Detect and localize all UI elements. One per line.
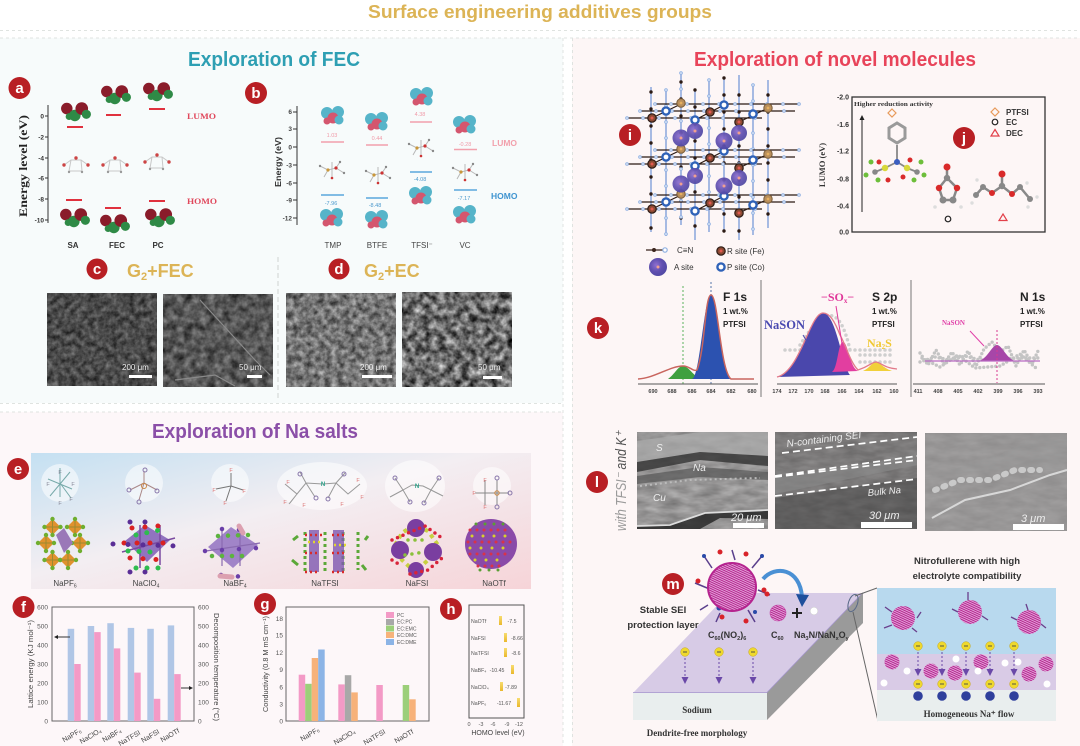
crystal labels: NaClO xyxy=(133,579,157,588)
chart f: lattice energy and decomposition temperature: Decomposition temperature (°C) xyxy=(212,613,220,721)
chart b: energy levels of TMP, BTFE, TFSI, VC: 0 xyxy=(288,144,292,152)
chart h: HOMO levels: -7.89 xyxy=(505,685,517,691)
diagram m: magnified interface: electrolyte compatibility xyxy=(913,571,1022,582)
chart f: lattice energy and decomposition temperature: 300 xyxy=(37,662,48,668)
chart b: energy levels of TMP, BTFE, TFSI, VC: 1.03 xyxy=(327,133,337,139)
spectrum: F 1s: 688 xyxy=(667,389,677,395)
badge l: l xyxy=(595,474,599,491)
chart f: lattice energy and decomposition temperature: 300 xyxy=(198,662,209,668)
badge j: j xyxy=(961,130,966,147)
label: stable SEI protection layer xyxy=(627,605,699,631)
anion: OTf: F xyxy=(483,478,487,484)
compound labels xyxy=(708,630,850,642)
crystal labels: 6 xyxy=(74,584,77,590)
chart g: conductivity: 6 xyxy=(279,684,283,692)
diagram m: magnified interface: Nitrofullerene with high xyxy=(914,556,1020,567)
heading: Exploration of novel molecules: Exploration of novel molecules xyxy=(694,49,976,71)
chart b: energy levels of TMP, BTFE, TFSI, VC: VC xyxy=(459,241,471,250)
SEM image: S, Na, Cu layers: Cu xyxy=(653,493,666,504)
chart f: lattice energy and decomposition temperature: 600 xyxy=(198,604,209,612)
badge m xyxy=(662,573,684,595)
spectrum: S 2p: −SO xyxy=(821,290,844,304)
diagram m: magnified interface: Homogeneous Na⁺ flow xyxy=(924,709,1015,719)
anion: OTf xyxy=(472,476,512,511)
badge c: c xyxy=(93,261,101,278)
SEM image: S, Na, Cu layers: Na xyxy=(693,463,706,474)
spectrum: F 1s: 1 wt.% xyxy=(723,307,748,316)
chart k: XPS spectra xyxy=(638,280,1046,397)
chart j: LUMO levels: LUMO (eV) xyxy=(817,143,827,187)
anion: PF6: F xyxy=(46,482,50,488)
nitrofullerene molecule xyxy=(695,550,770,624)
spectrum: S 2p: 164 xyxy=(854,389,865,395)
badge c xyxy=(86,258,108,280)
chart b: energy levels of TMP, BTFE, TFSI, VC: -8.48 xyxy=(369,203,381,209)
anion: TFSI: N xyxy=(321,482,325,488)
anion: TFSI: F xyxy=(360,495,364,501)
chart j: LUMO levels: -0.8 xyxy=(837,176,849,184)
legend g: EC:PC xyxy=(397,620,413,626)
spectrum: F 1s xyxy=(638,282,758,395)
chart h: HOMO levels: 0 xyxy=(467,722,471,728)
spectrum: F 1s: 682 xyxy=(726,389,736,395)
compound labels: O xyxy=(839,630,846,640)
chart f: lattice energy and decomposition temperature: NaOTf xyxy=(160,728,181,744)
spectrum: S 2p: 166 xyxy=(837,389,847,395)
chart f: lattice energy and decomposition temperature xyxy=(28,604,220,746)
spectrum: N 1s: PTFSI xyxy=(1020,320,1043,329)
compound labels: 2 xyxy=(737,636,740,642)
badge e: e xyxy=(14,461,22,478)
chart b: energy levels of TMP, BTFE, TFSI, VC: -4.08 xyxy=(414,177,426,183)
chart f: lattice energy and decomposition temperature: NaFSI xyxy=(140,729,161,745)
chart f: lattice energy and decomposition temperature: 500 xyxy=(198,624,209,630)
spectrum: N 1s: 411 xyxy=(914,389,922,395)
badge e xyxy=(7,458,29,480)
chart h: HOMO levels: NaBF₄ xyxy=(471,668,486,674)
chart h: HOMO levels: NaFSI xyxy=(471,636,486,642)
compound labels: x xyxy=(836,636,840,642)
spectrum: S 2p: 162 xyxy=(872,389,882,395)
badge g: g xyxy=(260,596,270,613)
compound labels: 6 xyxy=(743,636,746,642)
SEM image: 3 µm surface: 3 μm xyxy=(1021,513,1045,525)
chart b: energy levels of TMP, BTFE, TFSI, VC: TFSI⁻ xyxy=(411,241,433,250)
chart a: energy levels of SA, FEC, PC: -4 xyxy=(38,156,44,162)
anion: TFSI: F xyxy=(286,480,290,486)
chart f: lattice energy and decomposition temperature: 400 xyxy=(37,642,48,650)
chart a: energy levels of SA, FEC, PC: -8 xyxy=(38,196,44,204)
chart b: energy levels of TMP, BTFE, TFSI, VC: -6 xyxy=(286,180,292,188)
spectrum: S 2p: S xyxy=(885,336,892,350)
spectrum: N 1s xyxy=(913,290,1046,395)
badge k xyxy=(587,317,609,339)
badge i: i xyxy=(628,127,632,144)
molecule: EC xyxy=(933,164,963,209)
SEM image: S, Na, Cu layers: S xyxy=(656,443,663,454)
rotated label: with TFSI and K: with TFSI⁻ and K⁺ xyxy=(613,430,630,531)
crystal: NaFSI xyxy=(391,519,442,578)
badge l xyxy=(586,471,608,493)
anion: BF4: F xyxy=(229,468,233,474)
compound labels: 60 xyxy=(778,636,784,642)
anion: TFSI: F xyxy=(302,503,306,509)
blue curved arrow xyxy=(763,571,809,607)
chart j: LUMO levels: -2.0 xyxy=(837,94,849,102)
chart j: LUMO levels: -0.4 xyxy=(837,204,849,210)
chart g: conductivity: 18 xyxy=(276,616,283,623)
chart b: energy levels of TMP, BTFE, TFSI, VC: -7.17 xyxy=(458,196,470,202)
molecule: PTFSI xyxy=(864,123,926,182)
chart b: energy levels of TMP, BTFE, TFSI, VC: Energy (eV) xyxy=(274,137,283,187)
crystal labels: 4 xyxy=(157,584,160,590)
nitrofullerenes xyxy=(884,592,1046,634)
diagram m: sodium slab: Dendrite-free morphology xyxy=(647,728,748,738)
spectrum: N 1s: 405 xyxy=(953,389,963,395)
anion: TFSI: F xyxy=(283,500,287,506)
badge b: b xyxy=(251,85,261,102)
anion: BF4 xyxy=(212,468,246,507)
badge a xyxy=(8,77,30,99)
panel i: Prussian-blue lattice xyxy=(627,73,800,276)
spectrum: S 2p: − xyxy=(847,290,854,304)
spectrum: S 2p: NaSON xyxy=(764,318,805,332)
spectrum: N 1s: 1 wt.% xyxy=(1020,307,1045,316)
legend g: PC xyxy=(397,613,404,619)
heading: Exploration of FEC: Exploration of FEC xyxy=(188,49,360,71)
chart b: energy levels of TMP, BTFE, TFSI, VC: -9 xyxy=(286,198,292,204)
anion: PF6: F xyxy=(69,497,73,503)
chart f: lattice energy and decomposition temperature: 200 xyxy=(198,680,209,688)
background panel: FEC xyxy=(0,38,563,403)
SEM image: N-containing SEI and bulk Na: Bulk Na xyxy=(867,485,901,499)
chart a: energy levels of SA, FEC, PC: HOMO xyxy=(187,197,217,206)
spectrum: N 1s: 402 xyxy=(973,389,983,395)
spectrum: S 2p: 170 xyxy=(804,389,814,395)
badge f xyxy=(12,596,34,618)
chart h: HOMO levels: NaTFSI xyxy=(471,651,489,657)
chart h: HOMO levels: NaOTf xyxy=(471,619,487,625)
legend i: R site (Fe) xyxy=(727,247,765,256)
legend i: A site xyxy=(674,263,694,272)
SEM image: N-containing SEI and bulk Na xyxy=(775,430,917,529)
chart h: HOMO levels: HOMO level (eV) xyxy=(471,730,525,737)
spectrum: S 2p: Na xyxy=(867,336,882,350)
badge h xyxy=(440,598,462,620)
chart h: HOMO levels xyxy=(467,605,525,737)
anion: PF6: F xyxy=(71,482,75,488)
spectrum: S 2p: 168 xyxy=(820,389,830,395)
panel e: anion and crystal structures xyxy=(31,453,531,590)
crystal: NaTFSI xyxy=(292,530,368,574)
legend j: DEC xyxy=(1006,129,1023,138)
legend i xyxy=(646,246,765,276)
crystal labels: NaPF xyxy=(53,579,74,588)
chart f: lattice energy and decomposition temperature: NaPF₆ xyxy=(62,728,83,744)
badge b xyxy=(245,82,267,104)
spectrum: S 2p: 1 wt.% xyxy=(872,307,897,316)
anion: TFSI: F xyxy=(356,478,360,484)
chart g: conductivity: 0 xyxy=(279,718,283,726)
chart b: energy levels of TMP, BTFE, TFSI, VC: -0.28 xyxy=(459,142,471,148)
crystal labels: 4 xyxy=(244,584,247,590)
compound labels: (NO xyxy=(721,630,737,640)
crystal: NaClO4 xyxy=(113,522,178,572)
badge d xyxy=(328,258,350,280)
crystal labels: NaBF xyxy=(223,579,244,588)
chart j: LUMO levels: -1.6 xyxy=(837,122,849,129)
chart h: HOMO levels: -11.67 xyxy=(497,701,511,707)
SEM image: G2+EC 200 µm: 200 μm xyxy=(360,363,387,372)
heading: G2+FEC: G xyxy=(127,261,141,281)
SEM image: N-containing SEI and bulk Na: N-containing SEI xyxy=(786,430,862,450)
chart j: LUMO levels: -1.2 xyxy=(837,148,849,156)
SEM image: G2+FEC 50 µm xyxy=(163,294,273,387)
SEM image: G2+FEC 200 µm: 200 μm xyxy=(122,363,149,372)
molecule: DEC xyxy=(970,170,1039,209)
chart b: energy levels of TMP, BTFE, TFSI, VC: TMP xyxy=(325,241,341,250)
spectrum: S 2p: S 2p xyxy=(872,290,897,304)
chart f: lattice energy and decomposition temperature: 100 xyxy=(198,700,209,706)
diagram m: magnified interface xyxy=(877,556,1056,721)
chart a: energy levels of SA, FEC, PC: PC xyxy=(152,241,164,250)
chart g: conductivity: NaOTf xyxy=(394,729,415,745)
chart a: energy levels of SA, FEC, PC: -10 xyxy=(35,218,44,224)
badge k: k xyxy=(594,320,603,337)
heading: G2+EC: G xyxy=(364,261,378,281)
chart g: conductivity: 15 xyxy=(276,632,283,640)
chart j: LUMO levels xyxy=(817,94,1045,236)
chart b: energy levels of TMP, BTFE, TFSI, VC: HOMO xyxy=(491,191,518,201)
badge j xyxy=(953,127,975,149)
legend i: P site (Co) xyxy=(727,263,765,272)
anion: BF4: F xyxy=(223,501,227,507)
diagram m: sodium slab: Sodium xyxy=(682,705,712,715)
spectrum: F 1s: F 1s xyxy=(723,290,747,304)
chart b: energy levels of TMP, BTFE, TFSI, VC: 3 xyxy=(288,126,292,133)
chart h: HOMO levels: -3 xyxy=(479,722,483,728)
spectrum: N 1s: 393 xyxy=(1033,389,1043,395)
legend g: EC:EMC xyxy=(397,626,417,632)
heading: G2+EC: +EC xyxy=(384,261,420,281)
title: Surface engineering additives groups xyxy=(368,2,712,22)
anion: PF6 xyxy=(46,468,75,507)
chart j: LUMO levels: Higher reduction activity xyxy=(854,102,933,108)
anion: FSI: N xyxy=(415,484,419,490)
chart h: HOMO levels: NaClO₄ xyxy=(471,685,489,691)
chart h: HOMO levels: -8.6 xyxy=(512,651,521,657)
badge d: d xyxy=(334,261,344,278)
chart f: lattice energy and decomposition temperature: 100 xyxy=(37,700,48,706)
chart h: HOMO levels: -6 xyxy=(491,722,495,728)
badge i xyxy=(619,124,641,146)
spectrum: N 1s: 396 xyxy=(1013,389,1023,395)
anion: PF6: F xyxy=(58,470,62,476)
spectrum: N 1s: 399 xyxy=(993,389,1003,395)
crystal: NaOTf xyxy=(465,519,517,570)
compound labels: 3 xyxy=(806,636,809,642)
chart h: HOMO levels: -9 xyxy=(505,722,509,728)
legend j xyxy=(991,108,1029,138)
chart a: energy levels of SA, FEC, PC: -2 xyxy=(38,134,44,142)
compound labels: 60 xyxy=(714,636,721,642)
spectrum: S 2p: x xyxy=(844,297,848,305)
crystal labels: NaFSI xyxy=(406,579,428,588)
chart g: conductivity: Conductivity (0.8 M mS cm⁻¹) xyxy=(263,616,270,712)
label: stable SEI protection layer: Stable SEI xyxy=(640,605,686,616)
chart b: energy levels of TMP, BTFE, TFSI, VC: -7.96 xyxy=(325,201,337,207)
chart f: lattice energy and decomposition temperature: NaBF₄ xyxy=(102,728,123,744)
crystal labels xyxy=(53,579,507,590)
SEM image: G2+FEC 200 µm xyxy=(47,293,157,386)
spectrum: F 1s: 684 xyxy=(706,389,717,395)
anion: OTf: F xyxy=(472,491,476,497)
chart h: HOMO levels: -8.66 xyxy=(511,636,523,642)
chart h: HOMO levels: NaPF₆ xyxy=(471,701,486,707)
SEM image: N-containing SEI and bulk Na: 30 μm xyxy=(869,510,899,522)
badge m: m xyxy=(666,576,680,593)
SEM image: 3 µm surface xyxy=(925,433,1067,531)
chart g: conductivity: 9 xyxy=(279,667,283,674)
spectrum: S 2p: 2 xyxy=(882,343,886,351)
chart b: energy levels of TMP, BTFE, TFSI, VC: LUMO xyxy=(492,138,517,148)
chart b: energy levels of TMP, BTFE, TFSI, VC: BTFE xyxy=(367,241,387,250)
compound labels: N/NaN xyxy=(809,630,836,640)
crystal: NaBF4 xyxy=(205,526,260,577)
anion: ClO4 xyxy=(127,468,159,504)
spectrum: S 2p: 160 xyxy=(889,389,899,395)
legend j: PTFSI xyxy=(1006,108,1029,117)
compound labels: C xyxy=(771,630,778,640)
legend i: C≡N xyxy=(677,246,693,255)
SEM image: G2+FEC 50 µm: 50 μm xyxy=(239,363,262,372)
chart g: conductivity: 12 xyxy=(276,650,283,657)
SEM image: S, Na, Cu layers: 20 μm xyxy=(730,512,761,524)
compound labels: ) xyxy=(740,630,743,640)
chart a: energy levels of SA, FEC, PC: 0 xyxy=(40,114,44,120)
chart h: HOMO levels: -12 xyxy=(515,722,523,728)
spectrum: N 1s: NaSON xyxy=(942,319,965,327)
chart a: energy levels of SA, FEC, PC: FEC xyxy=(109,241,125,250)
chart f: lattice energy and decomposition temperature: NaClO₄ xyxy=(79,728,103,746)
spectrum: S 2p: 172 xyxy=(788,389,798,395)
spectrum: F 1s: PTFSI xyxy=(723,320,746,329)
spectrum: N 1s: N 1s xyxy=(1020,290,1046,304)
chart a: energy levels of SA, FEC, PC: SA xyxy=(67,241,79,250)
compound labels: Na xyxy=(794,630,806,640)
chart g: conductivity xyxy=(263,607,429,746)
crystal labels: NaOTf xyxy=(482,579,507,588)
anion: TFSI: F xyxy=(340,502,344,508)
chart a: energy levels of SA, FEC, PC: -6 xyxy=(38,176,44,182)
chart b: energy levels of TMP, BTFE, TFSI, VC xyxy=(274,87,518,250)
chart h: HOMO levels: -10.45 xyxy=(490,668,504,674)
anion: BF4: F xyxy=(212,488,216,494)
chart f: lattice energy and decomposition temperature: Lattice energy (KJ mol⁻¹) xyxy=(28,620,35,708)
badge h: h xyxy=(446,601,456,618)
legend g: EC:DMC xyxy=(397,633,417,639)
chart f: lattice energy and decomposition temperature: 500 xyxy=(37,624,48,630)
heading: G2+EC: 2 xyxy=(378,271,384,283)
C60 and salt particles xyxy=(880,654,1054,688)
legend j: EC xyxy=(1006,118,1017,127)
chart f: lattice energy and decomposition temperature: 400 xyxy=(198,642,209,650)
spectrum: S 2p xyxy=(764,290,899,395)
spectrum: F 1s: 680 xyxy=(747,389,757,395)
Na+ flow xyxy=(913,642,1019,701)
chart b: energy levels of TMP, BTFE, TFSI, VC: 6 xyxy=(288,109,292,116)
C60 ball, plus and Na compound xyxy=(770,605,818,621)
chart f: lattice energy and decomposition temperature: 0 xyxy=(44,718,48,726)
background panel: novel molecules xyxy=(572,38,1080,746)
heading: G2+FEC: 2 xyxy=(141,271,147,283)
crystal: NaPF6 xyxy=(36,517,90,570)
spectrum: S 2p: PTFSI xyxy=(872,320,895,329)
chart f: lattice energy and decomposition temperature: 600 xyxy=(37,604,48,612)
anion: OTf: F xyxy=(483,505,487,511)
anion: TFSI xyxy=(283,472,364,509)
spectrum: F 1s: 690 xyxy=(648,389,658,395)
panel: Exploration of Na salts xyxy=(7,421,531,746)
SEM image: G2+EC 200 µm xyxy=(286,293,396,387)
Na+ flow on slab xyxy=(681,648,757,684)
panel: Exploration of novel molecules xyxy=(586,49,1067,738)
chart j: LUMO levels: 0.0 xyxy=(839,230,849,236)
spectrum: F 1s: 686 xyxy=(687,389,697,395)
chart g: conductivity: NaPF₆ xyxy=(300,727,321,743)
chart b: energy levels of TMP, BTFE, TFSI, VC: 4.38 xyxy=(415,112,425,118)
spectrum: S 2p: 174 xyxy=(772,389,783,395)
chart b: energy levels of TMP, BTFE, TFSI, VC: 0.44 xyxy=(372,136,382,142)
diagram m: sodium slab xyxy=(627,550,878,738)
SEM image: G2+EC 50 µm xyxy=(402,292,512,387)
compound labels: C xyxy=(708,630,714,640)
chart a: energy levels of SA, FEC, PC xyxy=(18,82,217,250)
anion: BF4: F xyxy=(242,489,246,495)
anion: FSI xyxy=(390,476,443,505)
anion: PF6: F xyxy=(58,501,62,507)
spectrum: N 1s: 408 xyxy=(933,389,943,395)
chart f: lattice energy and decomposition temperature: 200 xyxy=(37,680,48,688)
compound labels: y xyxy=(846,636,850,642)
chart b: energy levels of TMP, BTFE, TFSI, VC: -12 xyxy=(283,216,292,222)
chart f: lattice energy and decomposition temperature: 0 xyxy=(198,718,202,726)
crystal labels: NaTFSI xyxy=(311,579,339,588)
chart a: energy levels of SA, FEC, PC: LUMO xyxy=(187,112,216,121)
badge f: f xyxy=(21,599,27,616)
label: stable SEI protection layer: protection layer xyxy=(627,620,699,631)
heading: Exploration of Na salts: Exploration of Na salts xyxy=(152,421,358,443)
chart h: HOMO levels: -7.5 xyxy=(508,619,517,625)
legend g: EC:DME xyxy=(397,640,417,646)
background panel: Na salts xyxy=(0,412,563,746)
badge a: a xyxy=(15,80,24,97)
chart a: energy levels of SA, FEC, PC: Energy level (eV) xyxy=(18,115,30,217)
legend g xyxy=(386,612,417,646)
SEM image: S, Na, Cu layers xyxy=(637,432,768,529)
chart b: energy levels of TMP, BTFE, TFSI, VC: -3 xyxy=(286,162,292,170)
badge g xyxy=(254,593,276,615)
heading: G2+FEC: +FEC xyxy=(147,261,194,281)
SEM image: G2+EC 50 µm: 50 μm xyxy=(478,363,501,372)
chart g: conductivity: 3 xyxy=(279,702,283,708)
panel: Exploration of FEC xyxy=(8,49,518,400)
